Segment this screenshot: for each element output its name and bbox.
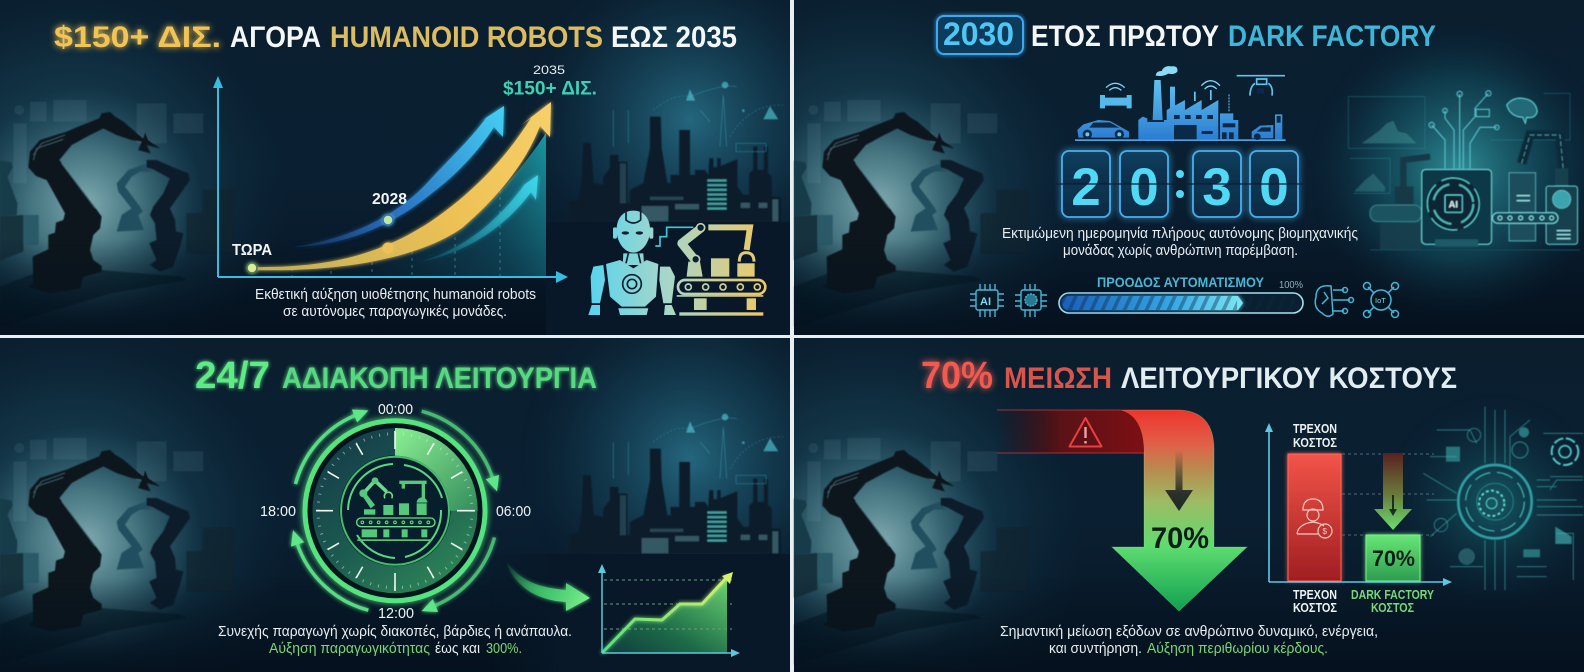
clock labels: 18:00	[260, 503, 296, 520]
chart axes	[598, 564, 740, 657]
panel background	[794, 338, 1584, 672]
title: $150+ ΔΙΣ.	[54, 21, 221, 54]
down arrow	[1374, 453, 1412, 530]
title	[195, 355, 597, 397]
automation progress	[1059, 275, 1303, 313]
arrow band	[997, 410, 1144, 453]
title: DARK FACTORY	[1228, 20, 1436, 53]
panel: 24/7 operation	[0, 338, 790, 672]
warning icon	[1070, 418, 1102, 446]
icon: worker: $	[1322, 527, 1328, 536]
robot arm and conveyor	[679, 258, 763, 316]
humanoid robot	[588, 211, 676, 315]
caption: σε αυτόνομες παραγωγικές μονάδες.	[283, 304, 507, 320]
circuit trace	[655, 227, 693, 246]
clock digits: 2	[1071, 158, 1101, 217]
drone	[1237, 76, 1285, 96]
factory skyline	[430, 0, 790, 335]
title: 2030	[943, 16, 1014, 52]
progress bar	[1059, 293, 1303, 313]
circuit disc backdrop	[1384, 393, 1584, 618]
top label: ΤΡΕΧΟΝ	[1293, 421, 1337, 436]
title: ΜΕΙΩΣΗ	[1004, 362, 1112, 395]
caption	[255, 287, 536, 320]
value label: $150+ ΔΙΣ.	[503, 78, 597, 100]
teal curve arrow	[420, 175, 538, 262]
caption: έως και	[435, 641, 480, 657]
inner cycle arrows	[348, 464, 442, 558]
bottom label: dark factory cost: ΚΟΣΤΟΣ	[1371, 600, 1414, 615]
gold curve arrow	[252, 102, 551, 270]
icon: IoT network: IoT	[1375, 296, 1386, 305]
factory details	[1083, 81, 1281, 140]
factory skyline	[430, 338, 790, 672]
cycle arrows	[286, 404, 504, 618]
panel: humanoid robots market	[0, 0, 790, 335]
title: ΛΕΙΤΟΥΡΓΙΚΟΥ ΚΟΣΤΟΥΣ	[1121, 362, 1457, 395]
caption	[1002, 226, 1358, 259]
progress fill	[1062, 296, 1294, 310]
clock digits: 0	[1259, 158, 1289, 217]
chart labels: 2028	[372, 191, 407, 208]
clock cards	[1062, 151, 1298, 217]
small inner arrow	[1389, 495, 1397, 516]
clock dial	[305, 421, 485, 601]
swoosh arrow	[506, 561, 590, 611]
clock digits: 3	[1202, 158, 1232, 217]
growth chart	[213, 65, 597, 283]
year badge	[937, 16, 1023, 54]
axes	[213, 76, 568, 283]
outer ring	[305, 421, 485, 601]
caption: και συντήρηση.	[1049, 641, 1142, 657]
title: ΑΔΙΑΚΟΠΗ ΛΕΙΤΟΥΡΓΙΑ	[282, 362, 597, 395]
major ticks	[316, 431, 475, 591]
bottom label: dark factory cost: DARK FACTORY	[1351, 587, 1434, 602]
cart robot	[1100, 95, 1132, 108]
clock labels: 06:00	[496, 503, 531, 520]
icon: AI brain	[1315, 286, 1354, 316]
caption: Συνεχής παραγωγή χωρίς διακοπές, βάρδιες ή ανάπαυλα.	[218, 624, 572, 640]
flip clock	[1056, 151, 1304, 217]
dial band	[326, 442, 464, 580]
icon: AI chip: AI	[980, 296, 991, 308]
chart labels	[232, 191, 407, 259]
bottom label: current cost	[1293, 587, 1337, 615]
blue curve arrow	[293, 106, 504, 247]
green bar value: 70%	[1372, 546, 1415, 571]
caption	[218, 624, 572, 657]
title: 24/7	[195, 355, 270, 397]
dark down arrow	[1165, 450, 1193, 511]
caption: Εκθετική αύξηση υιοθέτησης humanoid robots	[255, 287, 536, 303]
clock labels: 12:00	[378, 605, 414, 622]
panel background	[794, 0, 1584, 335]
bottom label: current cost: ΚΟΣΤΟΣ	[1293, 600, 1337, 615]
top label	[1293, 421, 1337, 450]
axes	[1265, 423, 1452, 586]
clock digits: 0	[1129, 158, 1159, 217]
chart arrow tip	[722, 572, 733, 584]
car	[1077, 120, 1129, 138]
title	[937, 16, 1436, 54]
cost comparison chart	[1265, 421, 1452, 615]
caption	[1000, 624, 1378, 657]
title: HUMANOID ROBOTS	[330, 21, 603, 54]
clock labels: 00:00	[378, 401, 413, 418]
second chimney	[1170, 87, 1175, 109]
caption: μονάδας χωρίς ανθρώπινη παρέμβαση.	[1063, 243, 1298, 259]
data points	[247, 215, 394, 273]
highlighted quadrant	[395, 428, 478, 511]
AI machine and circuit board	[1294, 0, 1584, 335]
title: ΕΩΣ 2035	[611, 21, 737, 54]
clock digits	[1071, 158, 1289, 217]
factory	[1138, 80, 1218, 139]
caption: 300%.	[486, 641, 522, 657]
icon: factory with car, drone and wifi	[1075, 66, 1286, 141]
icon: AI chip	[970, 284, 1004, 317]
panel: dark factory 2030	[794, 0, 1584, 335]
AI label: AI	[1449, 199, 1458, 209]
arrow body	[1112, 410, 1247, 611]
top label: ΚΟΣΤΟΣ	[1293, 435, 1337, 450]
title	[921, 355, 1457, 397]
green bar	[1366, 535, 1420, 581]
bottom label: dark factory cost	[1351, 587, 1434, 615]
title: ΑΓΟΡΑ	[230, 21, 321, 54]
productivity chart	[598, 564, 740, 657]
clock labels	[260, 401, 531, 622]
bottom label: current cost: ΤΡΕΧΟΝ	[1293, 587, 1337, 602]
arrow value: 70%	[1151, 522, 1209, 555]
small car and charger	[1252, 114, 1282, 139]
100 percent label: 100%	[1279, 280, 1303, 291]
panel background	[0, 338, 790, 672]
big reduction arrow	[997, 410, 1247, 611]
title: ΕΤΟΣ ΠΡΩΤΟΥ	[1031, 20, 1219, 53]
title	[54, 21, 737, 54]
caption: Εκτιμώμενη ημερομηνία πλήρους αυτόνομης βιομηχανικής	[1002, 226, 1358, 242]
colon	[1176, 170, 1184, 198]
icon: humanoid robot and conveyor	[588, 211, 765, 316]
icon: IoT network	[1364, 282, 1398, 318]
caption: Σημαντική μείωση εξόδων σε ανθρώπινο δυναμικό, ενέργεια,	[1000, 624, 1378, 640]
panel: 70% cost reduction	[794, 338, 1584, 672]
2035 label: 2035	[533, 65, 565, 77]
caption: Αύξηση παραγωγικότητας	[269, 641, 430, 657]
title: 70%	[921, 355, 993, 397]
icon: processor	[1015, 284, 1047, 317]
side building	[1220, 113, 1238, 139]
icon: worker	[1297, 499, 1332, 538]
panel background	[0, 0, 790, 335]
progress label: ΠΡΟΟΔΟΣ ΑΥΤΟΜΑΤΙΣΜΟΥ	[1097, 275, 1264, 290]
current cost bar	[1288, 454, 1341, 581]
caption: Αύξηση περιθωρίου κέρδους.	[1147, 641, 1328, 657]
band edges	[997, 410, 1144, 453]
factory icon	[357, 477, 435, 541]
chart labels: ΤΩΡΑ	[232, 242, 272, 259]
dashed guides	[1342, 454, 1434, 535]
chimney smoke	[1156, 66, 1177, 76]
inner disc	[341, 457, 449, 565]
minor ticks	[318, 434, 472, 588]
